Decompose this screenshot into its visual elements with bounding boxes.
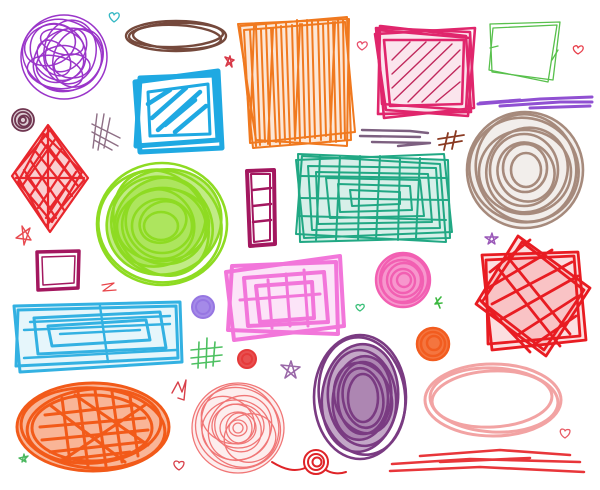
orange lined square <box>238 17 355 148</box>
small red squiggle bottom <box>172 380 186 400</box>
green thin square <box>489 22 560 82</box>
icon: small red star <box>225 56 234 67</box>
orange scribbled ellipse <box>17 383 169 473</box>
purple tangled circle <box>12 8 114 104</box>
green scribbled rectangle <box>296 154 452 242</box>
red tangled yarn <box>272 450 346 474</box>
dark small circle <box>12 109 34 131</box>
gray strokes <box>360 130 430 146</box>
blue scribbled square <box>135 71 222 152</box>
taupe circle <box>455 102 593 238</box>
salmon tangled circle <box>182 372 294 482</box>
red long strokes <box>390 450 584 472</box>
green hash mark <box>191 338 222 368</box>
small magenta rectangle <box>37 251 79 290</box>
lime scribbled circle <box>86 153 236 296</box>
brown ellipse <box>126 21 226 51</box>
crimson square with hatching <box>375 26 475 118</box>
purple strokes <box>478 97 592 108</box>
magenta tall rectangle <box>247 170 275 246</box>
gray hash mark <box>92 114 120 150</box>
icon: green small star <box>435 297 442 308</box>
pink circle <box>376 253 430 307</box>
icon: red small star left <box>16 226 31 245</box>
orange circle <box>417 328 449 360</box>
icon: green star bottom left <box>19 454 28 462</box>
icon: teal heart <box>109 13 119 22</box>
icon: purple star <box>281 361 300 378</box>
icon: purple star upper right <box>485 233 498 244</box>
small red squiggle <box>102 283 116 291</box>
red star of two squares <box>476 236 590 356</box>
icon: red heart right <box>573 46 583 54</box>
red dot <box>238 350 256 368</box>
blue lined rectangle <box>14 302 182 372</box>
purple dot <box>192 296 214 318</box>
pink scribbled square <box>226 256 344 340</box>
icon: red heart bottom center <box>174 461 184 470</box>
dark purple ellipse <box>311 332 413 460</box>
red diamond <box>12 125 88 232</box>
icon: red heart middle <box>357 42 367 50</box>
icon: green heart <box>356 304 364 311</box>
icon: red heart bottom right <box>560 429 570 438</box>
brown hash mark <box>438 131 464 150</box>
pink ring ellipse <box>425 364 561 436</box>
